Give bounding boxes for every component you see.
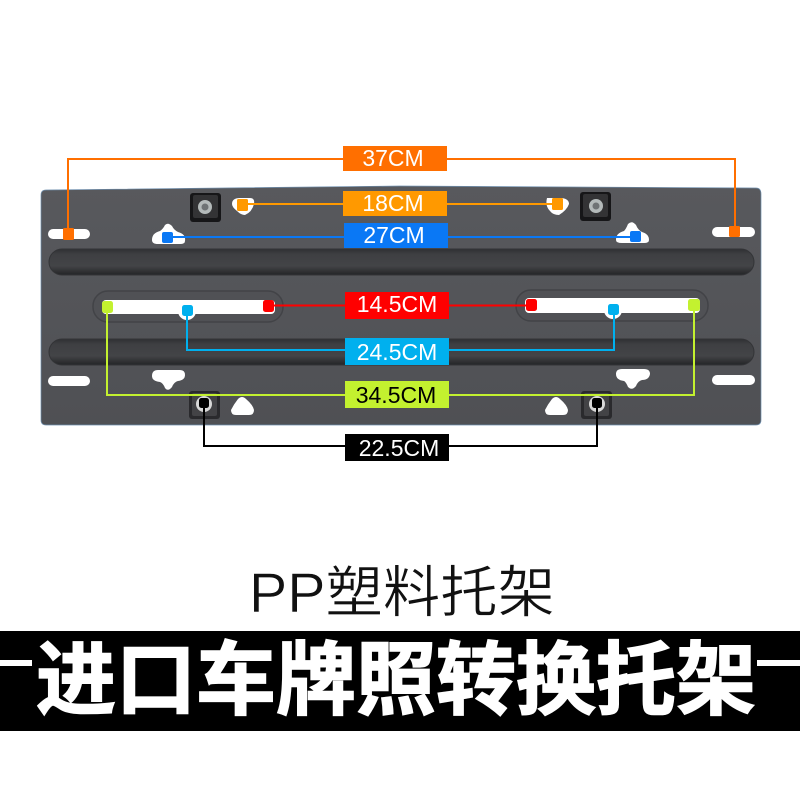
dimension 27CM [162, 222, 641, 248]
mounting holes [48, 198, 755, 415]
lower groove [49, 339, 754, 365]
dimension 34.5CM: 34.5CM [356, 382, 436, 408]
dimension 18CM: 18CM [362, 190, 424, 216]
dimension 14.5CM: 14.5CM [357, 291, 437, 317]
upper groove [49, 249, 754, 275]
right long slot [516, 290, 708, 321]
dimension 22.5CM: 22.5CM [359, 435, 439, 461]
dimension 24.5CM: 24.5CM [357, 339, 437, 365]
dimension 27CM: 27CM [363, 222, 425, 248]
dimension 37CM: 37CM [362, 145, 424, 171]
dimension 24.5CM [182, 304, 619, 365]
dimension 22.5CM [199, 398, 602, 461]
dimension 34.5CM [102, 299, 700, 408]
title banner: 进口车牌照转换托架 [36, 636, 756, 725]
nuts [189, 192, 612, 419]
dimension 14.5CM [263, 291, 537, 319]
subtitle: PP塑料托架 [249, 561, 555, 624]
bracket plate [41, 186, 761, 425]
left long slot [93, 291, 283, 322]
dimension 18CM [237, 190, 563, 216]
dimension 37CM [63, 145, 740, 240]
